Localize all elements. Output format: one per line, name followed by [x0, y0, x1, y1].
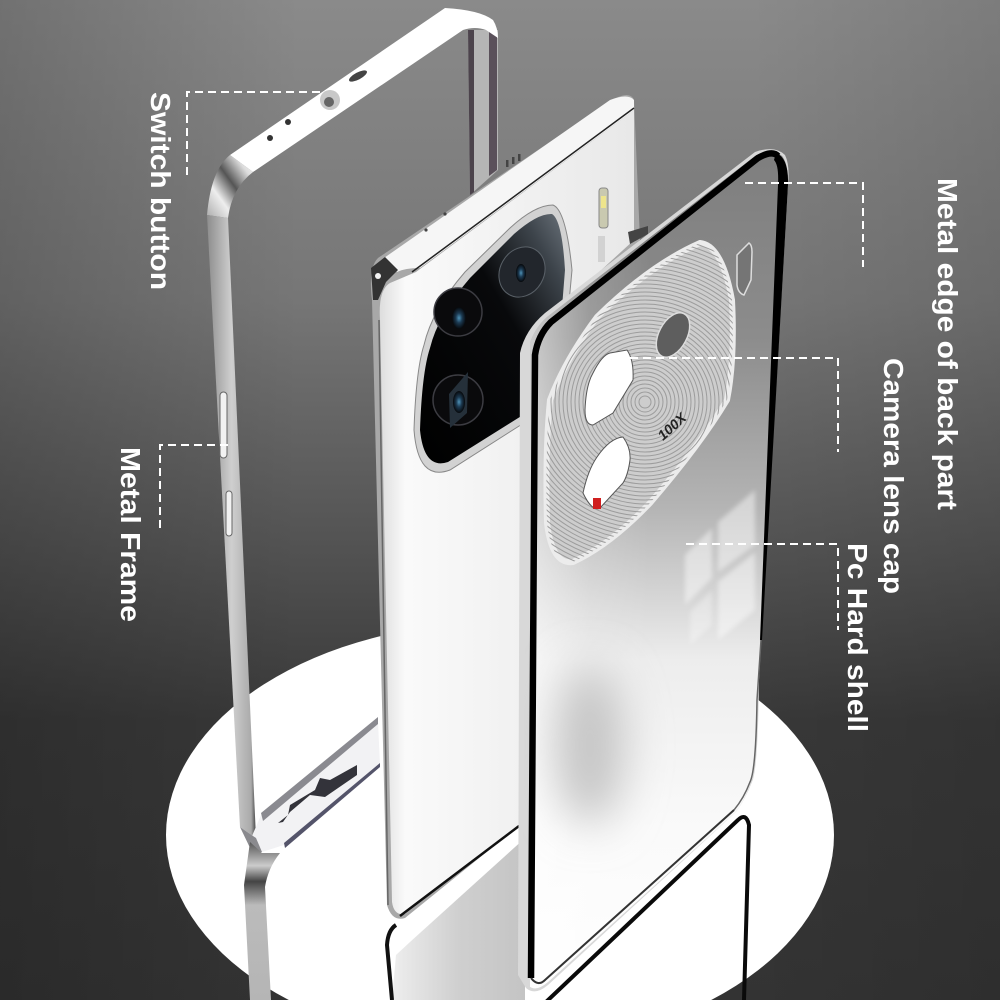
thin right edge — [734, 640, 761, 810]
thin bottom edge — [531, 810, 734, 983]
case clip tab — [628, 226, 648, 244]
window reflection — [685, 490, 755, 645]
leader: switch button — [187, 92, 322, 175]
gray shadow — [556, 665, 624, 825]
upper lens hole — [585, 350, 633, 425]
speaker dots — [424, 154, 520, 232]
flash — [599, 188, 608, 228]
volume button — [220, 392, 232, 536]
callout: metal edge — [745, 178, 963, 510]
lower lens hole — [583, 437, 630, 509]
phone — [371, 95, 648, 1000]
case flash window — [737, 243, 752, 295]
case reflection outline — [546, 817, 749, 1000]
frame corner — [207, 155, 253, 218]
frame top bar — [230, 8, 498, 172]
phone body outline — [371, 95, 640, 919]
label: camera lens cap: Camera lens cap — [878, 358, 909, 594]
metal frame — [207, 8, 498, 1000]
callout: metal frame — [115, 445, 232, 622]
100X mark: 100X — [654, 408, 691, 443]
back case — [518, 149, 789, 1000]
cap rim — [546, 243, 733, 562]
phone left edge — [379, 320, 388, 905]
callout: pc hard shell — [686, 543, 873, 732]
frame right rail — [468, 30, 498, 195]
label: metal frame: Metal Frame — [115, 447, 146, 622]
case pane — [530, 150, 792, 1000]
strip black line — [412, 108, 634, 272]
upper lens — [490, 238, 554, 306]
leader: metal edge — [745, 183, 863, 267]
red dot — [593, 498, 601, 509]
lower lens — [433, 372, 483, 428]
label: metal edge: Metal edge of back part — [932, 178, 963, 510]
callout: switch button — [145, 92, 322, 290]
black tapered right edge — [760, 153, 788, 640]
phone top strip — [384, 96, 634, 272]
corner accent — [371, 257, 398, 300]
black top and left edge — [531, 153, 778, 978]
frame left rail — [207, 215, 256, 838]
phone back panel — [380, 110, 634, 914]
phone reflection — [392, 838, 525, 1000]
speaker slot — [348, 68, 368, 84]
case silver rim — [518, 149, 789, 991]
leader: metal frame — [160, 445, 232, 528]
main lens — [434, 288, 482, 336]
frame reflection — [244, 842, 280, 1000]
leader: camera lens cap — [630, 358, 838, 452]
camera module — [420, 214, 565, 463]
white podium disc — [166, 622, 834, 1000]
reflection edge — [387, 925, 396, 1000]
dark lens hole — [649, 307, 697, 363]
mic holes — [267, 119, 291, 141]
callout: camera lens cap — [630, 358, 909, 594]
leader: pc hard shell — [686, 544, 838, 630]
phone bottom edge — [400, 826, 519, 916]
frame bottom bar — [240, 717, 380, 852]
label: switch button: Switch button — [145, 92, 176, 290]
camera lens cap — [544, 240, 736, 566]
side label — [598, 236, 605, 262]
label: pc hard shell: Pc Hard shell — [842, 543, 873, 732]
concentric pattern — [546, 244, 733, 562]
switch button — [320, 90, 340, 110]
camera module rim — [414, 205, 572, 472]
